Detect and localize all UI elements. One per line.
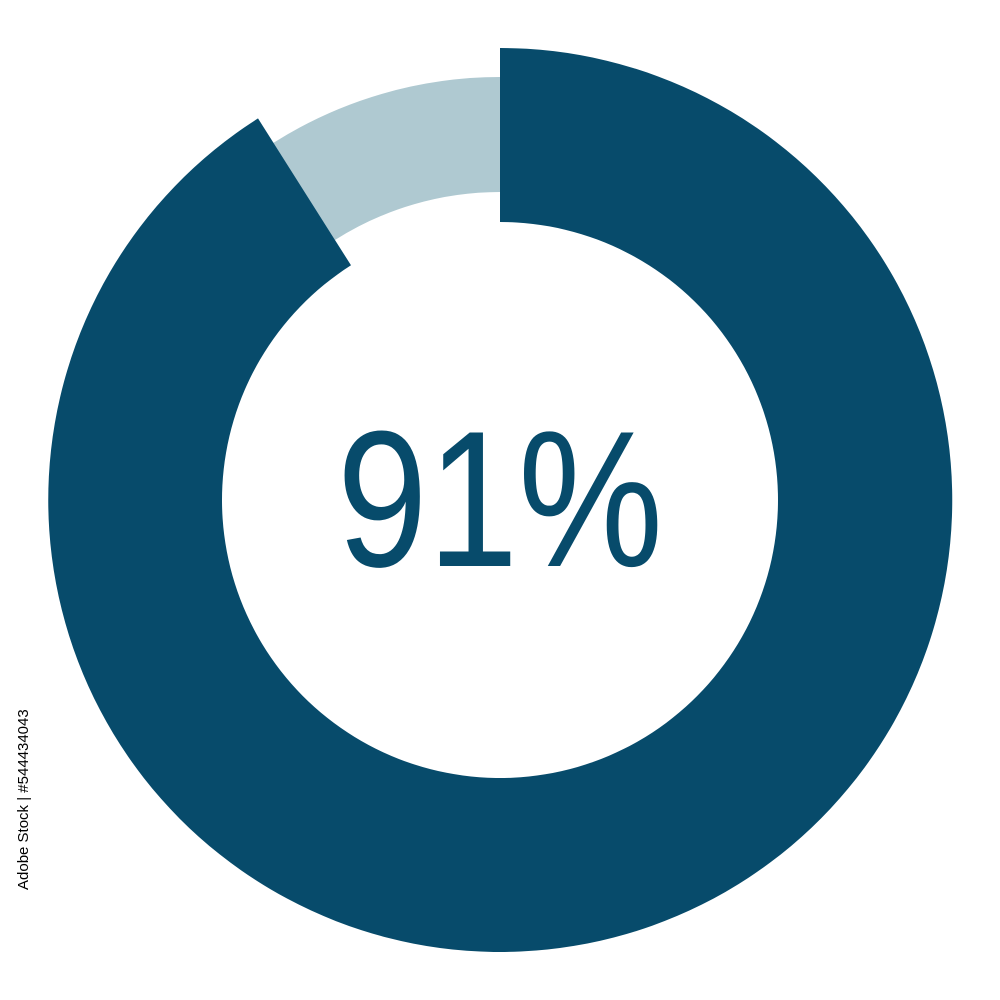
remaining segment: 9% — [273, 77, 500, 240]
percentage label: 91% — [337, 391, 663, 607]
watermark id: Adobe Stock | #544434043 — [15, 709, 32, 890]
